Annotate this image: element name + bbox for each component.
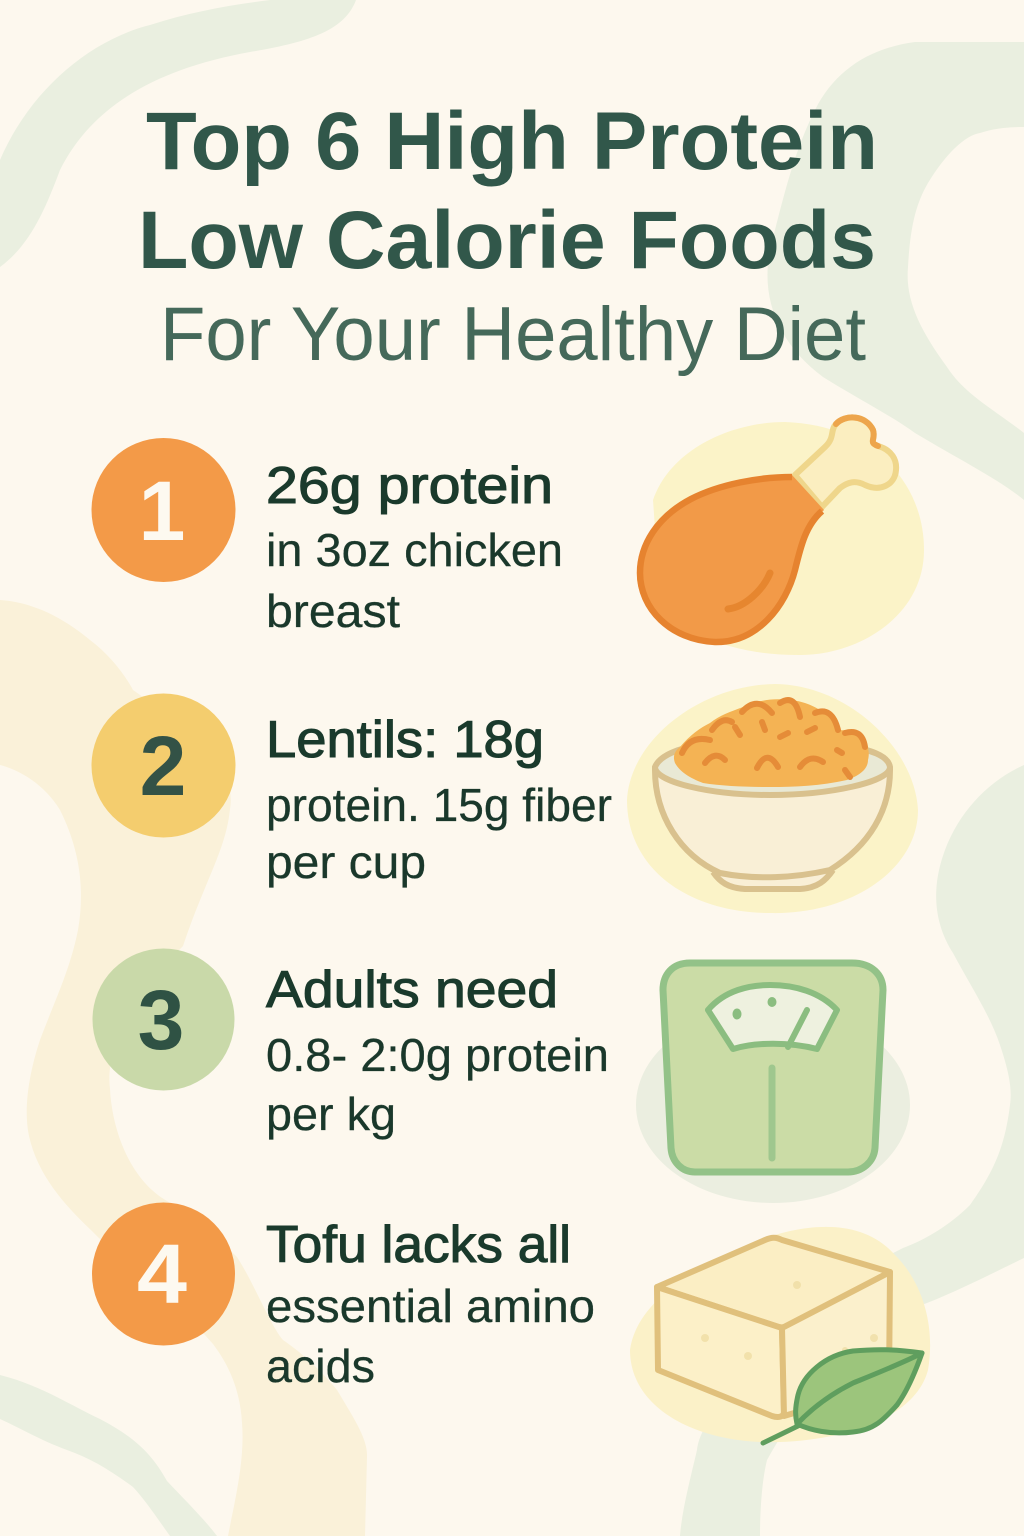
number badge 1: 1 [139,464,185,558]
item 3 text: 0.8- 2:0g protein [266,1029,609,1081]
item 3 text: per kg [266,1088,396,1140]
title [138,96,878,377]
subtitle: For Your Healthy Diet [160,292,866,377]
number badge 1 [92,438,236,582]
icon: weighing scale [636,963,910,1203]
item 1 text [266,457,563,637]
number badge 4 [92,1202,235,1346]
panel: item 1 chicken protein [92,417,924,655]
item 4 text: Tofu lacks all [266,1216,571,1274]
icon: tofu block with leaf [630,1227,930,1443]
item 2 text: Lentils: 18g [266,711,544,769]
item 4 text: acids [266,1340,375,1392]
title line 2: Low Calorie Foods [138,195,876,286]
item 1 text: breast [266,585,400,637]
item 2 text: per cup [266,836,426,888]
item 4 text [266,1216,595,1392]
item 4 text: essential amino [266,1280,595,1332]
item 1 text: in 3oz chicken [266,524,563,576]
number badge 4: 4 [137,1227,187,1321]
title line 1: Top 6 High Protein [146,96,878,187]
item 3 text [266,961,609,1140]
icon: bowl of lentils [627,684,918,913]
number badge 3: 3 [138,973,184,1067]
item 2 text [266,711,612,888]
number badge 2 [92,694,236,838]
item 3 text: Adults need [266,961,558,1019]
panel: item 3 daily protein need [92,948,910,1203]
panel: item 2 lentils [92,684,918,913]
number badge 3 [92,948,234,1090]
item 2 text: protein. 15g fiber [266,779,612,831]
panel: item 4 tofu [92,1202,930,1443]
item 1 text: 26g protein [266,457,553,515]
icon: chicken drumstick [637,417,924,655]
number badge 2: 2 [140,719,186,813]
